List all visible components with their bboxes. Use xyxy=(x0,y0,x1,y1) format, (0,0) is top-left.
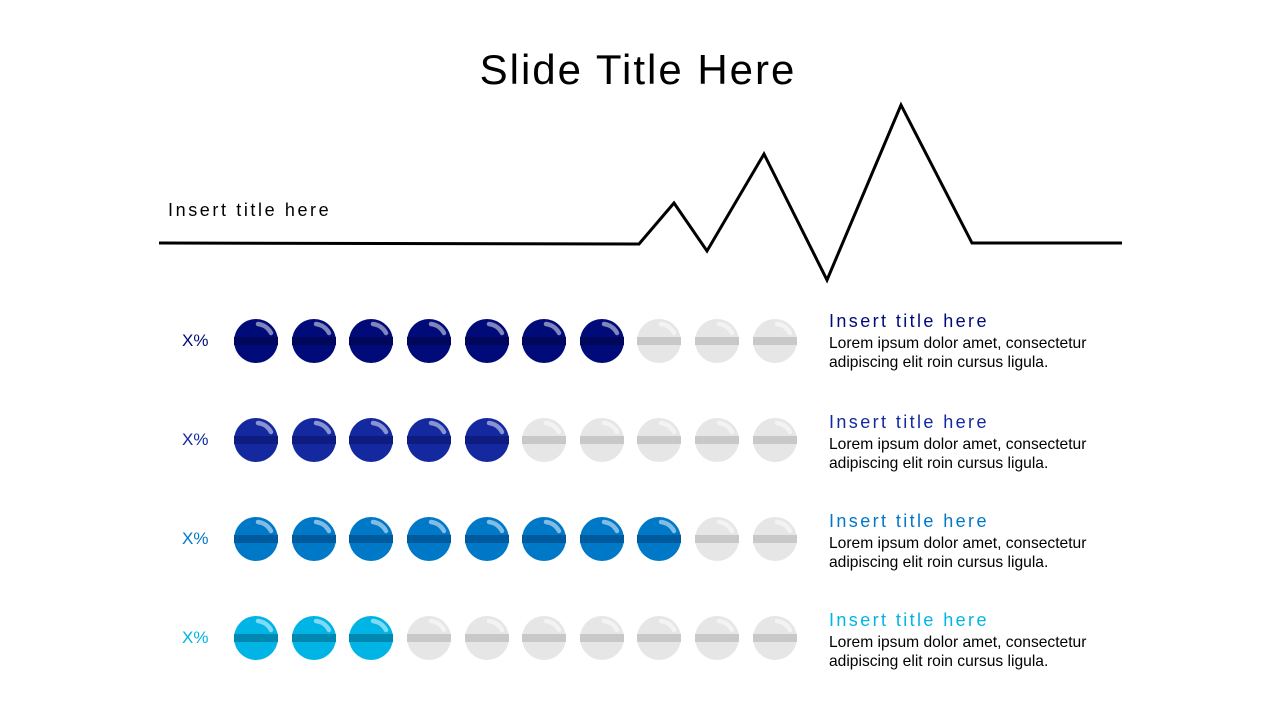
text block 1: adipiscing elit roin cursus ligula. xyxy=(829,354,1048,371)
text block 4 xyxy=(829,610,1086,670)
text block 2 xyxy=(829,412,1086,472)
row 3 percent: X% xyxy=(182,529,208,548)
title: Slide Title Here xyxy=(480,46,796,93)
text block 3: Lorem ipsum dolor amet, consectetur xyxy=(829,535,1086,552)
subtitle label: Insert title here xyxy=(168,200,331,220)
text block 1: Lorem ipsum dolor amet, consectetur xyxy=(829,335,1086,352)
text block 4: Lorem ipsum dolor amet, consectetur xyxy=(829,634,1086,651)
text block 4: Insert title here xyxy=(829,610,989,630)
row 1 percent: X% xyxy=(182,331,208,350)
row 2 percent: X% xyxy=(182,430,208,449)
text block 3: Insert title here xyxy=(829,511,989,531)
text block 1: Insert title here xyxy=(829,311,989,331)
text block 1 xyxy=(829,311,1086,371)
text block 3: adipiscing elit roin cursus ligula. xyxy=(829,554,1048,571)
text block 2: adipiscing elit roin cursus ligula. xyxy=(829,455,1048,472)
row 4 percent: X% xyxy=(182,628,208,647)
text block 2: Lorem ipsum dolor amet, consectetur xyxy=(829,436,1086,453)
text block 4: adipiscing elit roin cursus ligula. xyxy=(829,653,1048,670)
text block 3 xyxy=(829,511,1086,571)
text block 2: Insert title here xyxy=(829,412,989,432)
